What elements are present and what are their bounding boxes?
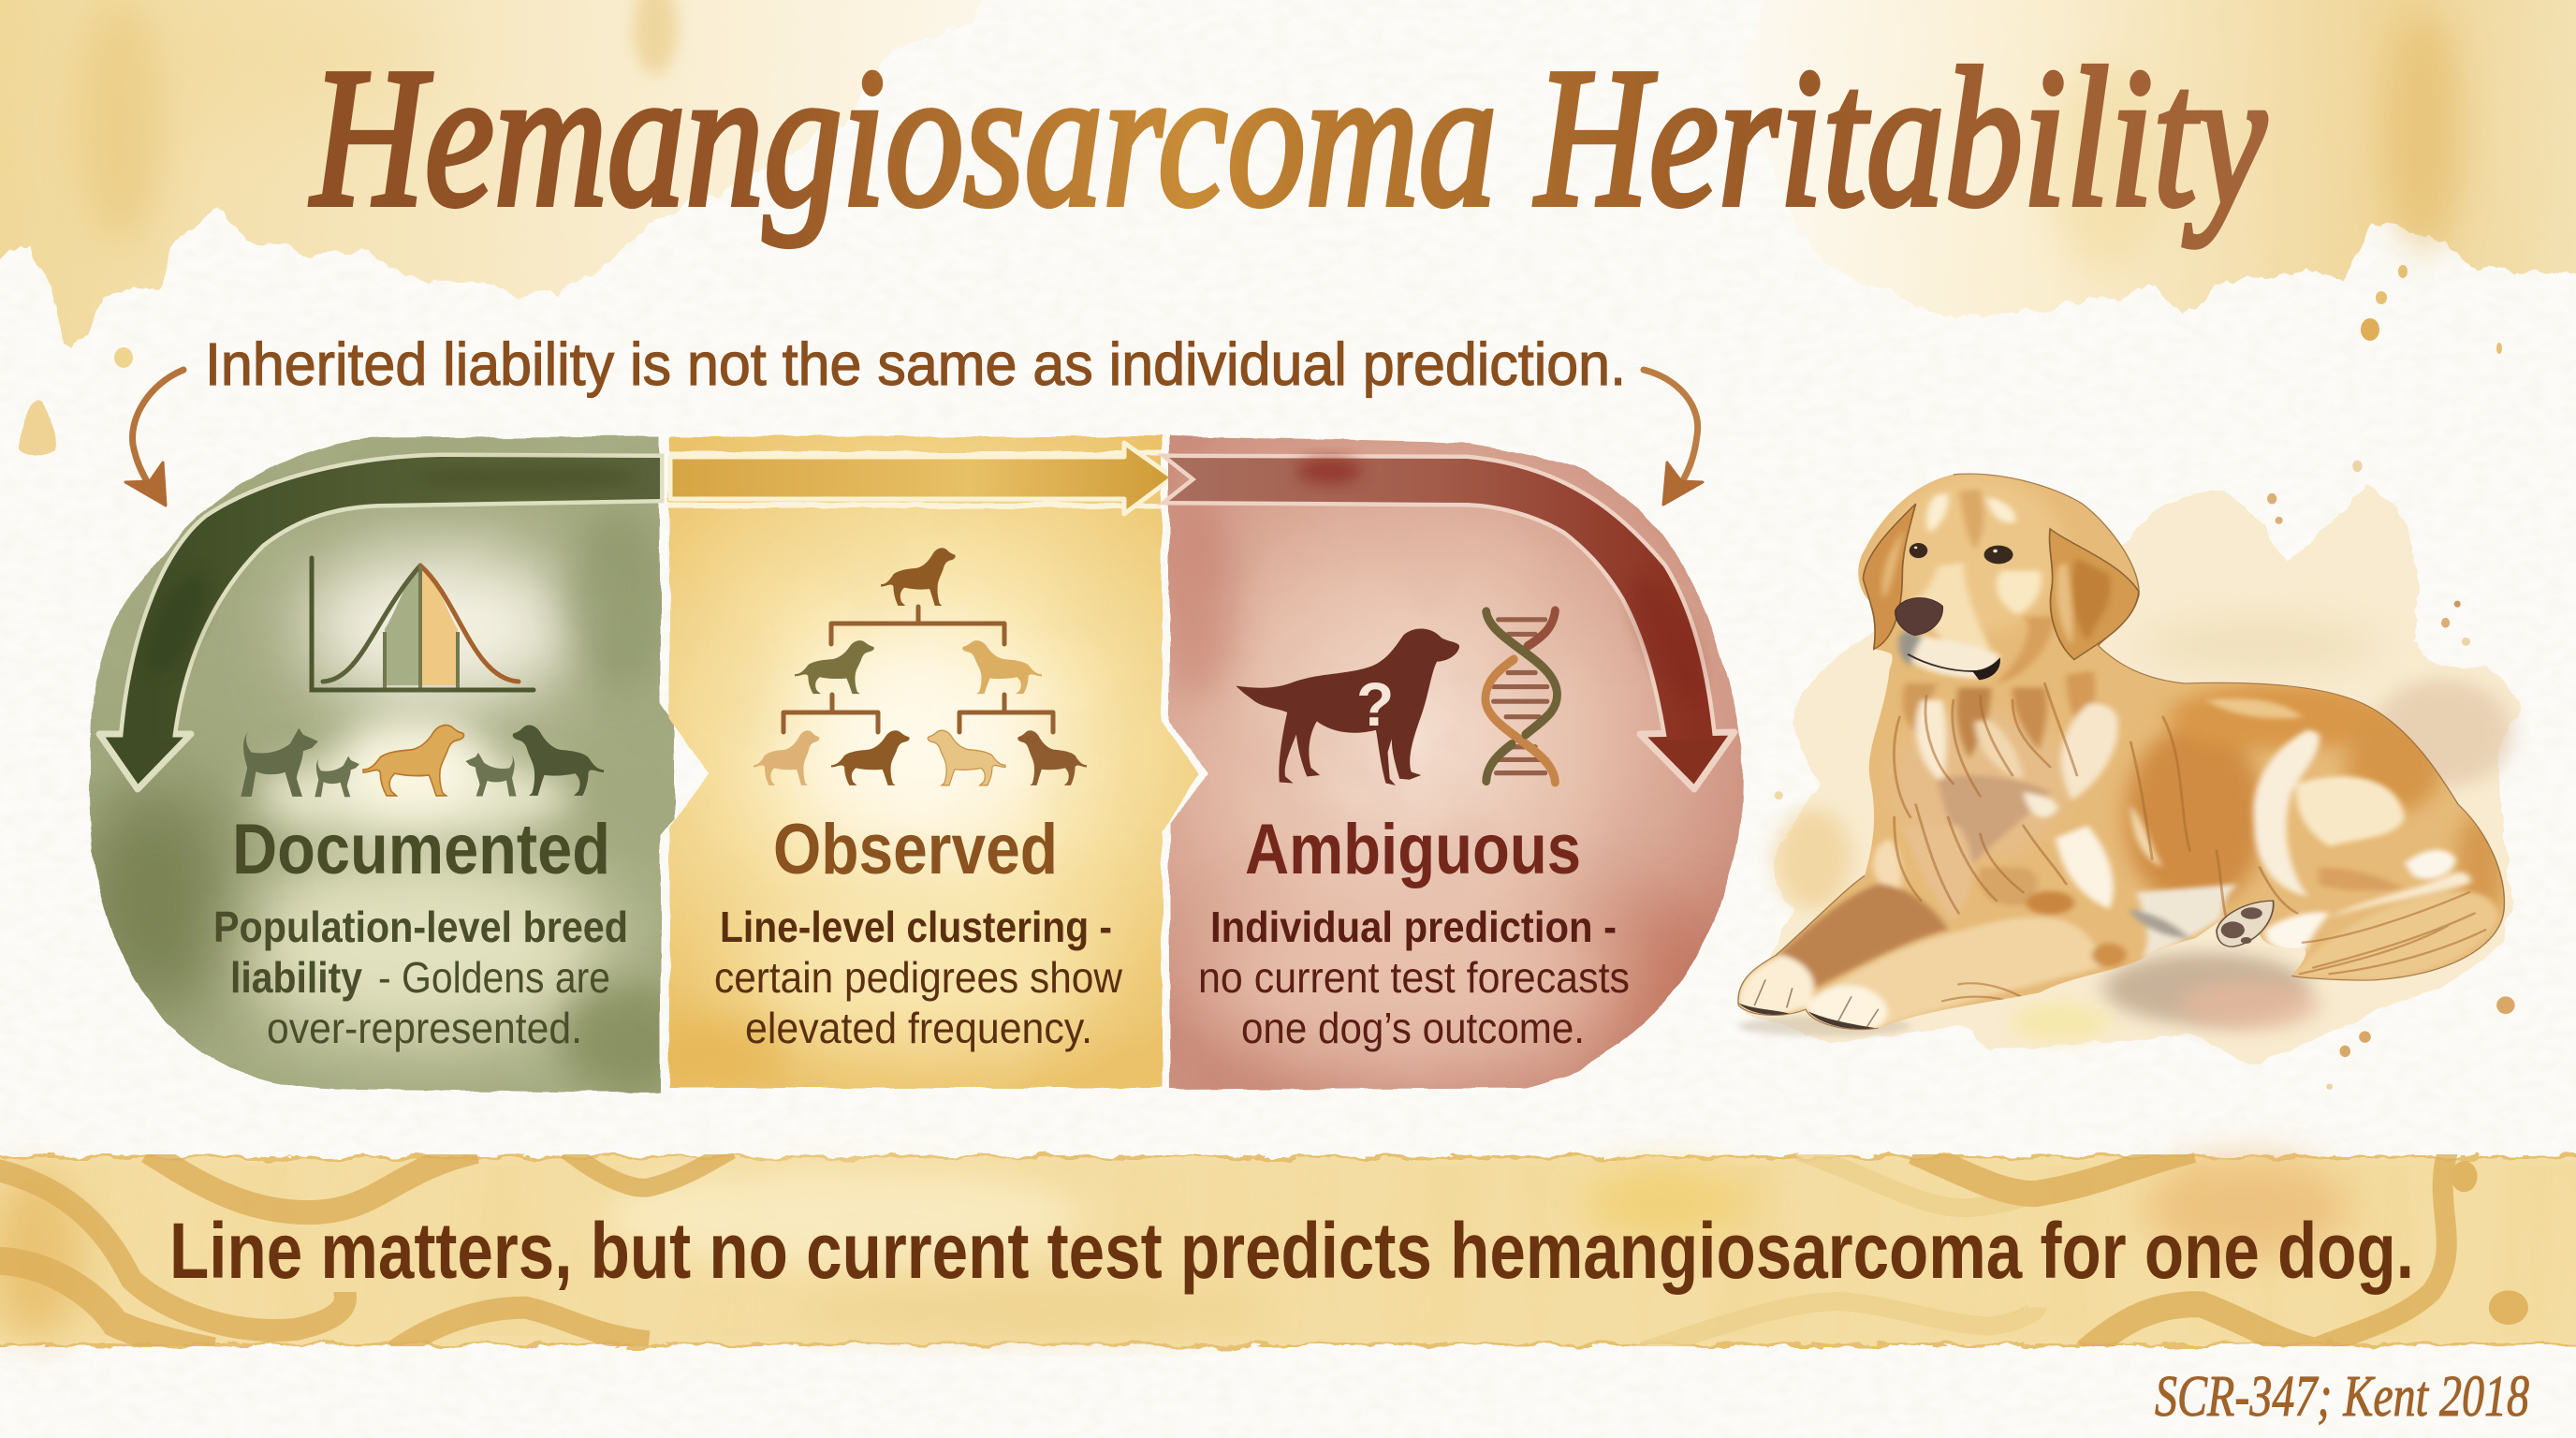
banner watercolor strip — [0, 1156, 2576, 1344]
arrow: right curved pointer — [1644, 370, 1703, 505]
dog hind paw — [2217, 901, 2274, 946]
description: documented: liability — [230, 953, 362, 1002]
dog eyes — [1910, 543, 2013, 564]
banner swirl ornaments — [0, 1150, 2528, 1351]
dog body — [1737, 474, 2505, 1030]
banner: bottom takeaway — [0, 1150, 2576, 1351]
subtitle: Inherited liability is not the same as individual prediction. — [205, 330, 1626, 398]
dog background wash — [1738, 483, 2519, 1064]
description: documented: Population-level breed — [213, 902, 628, 951]
yellow arrow band — [670, 443, 1173, 514]
description: documented — [213, 902, 628, 1052]
dog mouth — [1908, 654, 2000, 680]
watercolor wash: top right — [1741, 0, 2576, 318]
icon: bell curve chart — [312, 558, 534, 690]
green curved arrow band — [99, 457, 660, 789]
dog wash splatter dots — [1775, 461, 2515, 1090]
icon: pedigree tree of dogs — [754, 548, 1087, 785]
description: observed: certain pedigrees show — [714, 953, 1123, 1002]
red curved arrow band — [1169, 458, 1734, 789]
dog ear left — [1863, 504, 1916, 649]
dog nose — [1895, 598, 1942, 636]
heading: Ambiguous: Ambiguous — [1245, 810, 1581, 889]
icon: dog silhouette with question mark: ? — [1356, 669, 1394, 739]
panel: documented — [75, 421, 693, 1105]
panel: observed — [666, 434, 1198, 1089]
watercolor wash: top left — [0, 0, 1002, 346]
heading: Documented: Documented — [232, 810, 610, 889]
description: ambiguous: Individual prediction - — [1210, 902, 1617, 951]
icon: dog silhouette with question mark — [1236, 629, 1459, 785]
icon: DNA double helix — [1486, 610, 1558, 783]
arrow: left curved pointer — [125, 370, 183, 506]
dog ear right — [2050, 529, 2139, 660]
description: ambiguous: one dog’s outcome. — [1241, 1004, 1585, 1052]
green watercolor panel shape — [75, 421, 693, 1105]
description: observed: Line-level clustering - — [720, 902, 1112, 951]
yellow watercolor panel shape — [666, 434, 1198, 1089]
description: ambiguous: no current test forecasts — [1198, 953, 1630, 1002]
red watercolor panel shape — [1151, 421, 1760, 1105]
panel: ambiguous — [1151, 421, 1760, 1105]
icon: breed dog row with highlighted golden — [241, 716, 604, 810]
illustration: golden retriever with watercolor wash — [1722, 449, 2528, 1064]
dog paw pads — [2221, 907, 2262, 944]
description: observed — [714, 902, 1123, 1052]
description: observed: elevated frequency. — [745, 1004, 1092, 1052]
description: ambiguous — [1198, 902, 1630, 1052]
paint splatter drops — [19, 265, 2502, 456]
heading: Observed: Observed — [773, 810, 1058, 889]
description: documented: - Goldens are — [378, 953, 610, 1002]
description: documented: over-represented. — [267, 1004, 582, 1052]
